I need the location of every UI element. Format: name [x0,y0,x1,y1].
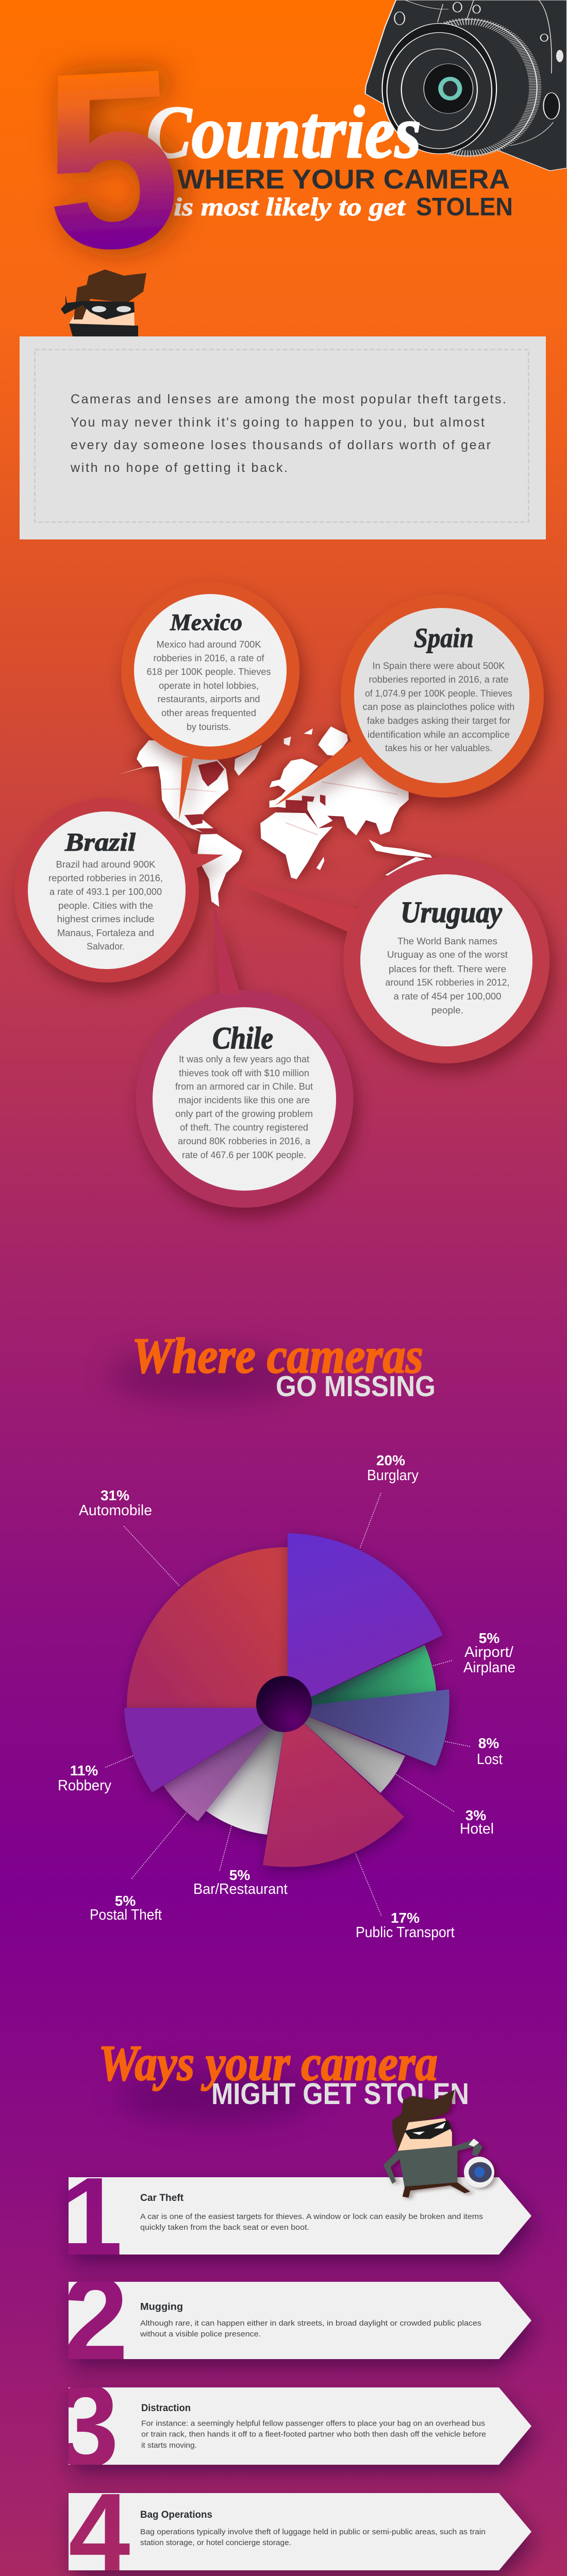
panel: Chile bubble: of theft. The country registered [180,1122,308,1132]
heading: Where cameras go missing [108,1328,436,1403]
panel: Mexico bubble: Mexico [170,609,242,635]
panel: Spain bubble [275,595,544,806]
panel: Spain bubble: takes his or her valuables. [385,743,492,753]
panel: Brazil bubble: Manaus, Fortaleza and [57,928,154,938]
panel: Chile bubble [136,902,354,1208]
panel: 4 Bag Operations [60,2490,543,2576]
chart label: Automobile 31%: Automobile [79,1502,152,1519]
panel: Spain bubble: In Spain there were about 500K [372,660,505,671]
title: Stolen: STOLEN [416,193,513,221]
panel: Chile bubble: rate of 467.6 per 100K people. [182,1150,306,1160]
panel: 2 Mugging: Although rare, it can happen either in dark streets, in broad daylight or crowded public places [140,2319,481,2328]
panel: Spain bubble: Spain [414,622,474,653]
chart label: Hotel 3%: Hotel [460,1821,494,1837]
panel: Brazil bubble: highest crimes include [57,914,155,924]
panel: Spain bubble: of 1,074.9 per 100K people. Thieves [365,688,512,699]
panel: 3 Distraction: or train rack, then hands it off to a fleet-footed partner who both then dash off the vehicle before [141,2430,486,2439]
panel: intro: Cameras and lenses are among the most popular theft targets. [71,392,506,406]
chart label: Lost 8% [445,1735,503,1768]
panel: intro: You may never think it's going to happen to you, but almost [71,415,485,430]
chart label: Public Transport 17% [356,1854,455,1941]
panel: Uruguay bubble: Uruguay as one of the worst [387,950,508,960]
chart label: Bar/Restaurant 5%: 5% [229,1867,250,1883]
panel: Mexico bubble: restaurants, airports and [158,694,260,704]
chart label: Public Transport 17%: 17% [391,1910,420,1926]
title: big number 5: 5 [37,15,187,304]
panel: Brazil bubble: people. Cities with the [58,901,153,911]
chart: pie of theft locations [124,1533,449,1867]
icon: running thief with camera bag [383,2090,494,2198]
panel: 2 Mugging: without a visible police presence. [140,2330,261,2338]
panel: 4 Bag Operations: station storage, or hotel concierge storage. [140,2538,291,2547]
chart label: Airport/Airplane 5% [433,1630,515,1676]
chart: world map [118,726,438,907]
panel: Chile bubble: Chile [212,1021,273,1055]
chart label: Burglary 20% [360,1452,419,1549]
panel: 2 Mugging [61,2279,542,2381]
chart label: Lost 8%: 8% [478,1735,499,1751]
panel: intro [20,336,546,539]
panel: Brazil bubble: Brazil had around 900K [56,859,156,870]
chart label: Postal Theft 5%: Postal Theft [90,1907,162,1923]
panel: intro: every day someone loses thousands of dollars worth of gear [71,438,491,452]
panel: Uruguay bubble [228,857,549,1063]
chart label: Burglary 20%: Burglary [367,1467,419,1484]
heading: Where cameras go missing: Where cameras [132,1328,423,1384]
chart label: Public Transport 17%: Public Transport [356,1924,455,1941]
chart label: Airport/Airplane 5%: Airport/ [464,1644,514,1660]
chart label: Automobile 31% [79,1487,180,1586]
heading: Ways your camera might get stolen: Ways your camera [98,2036,438,2091]
panel: 4 Bag Operations: Bag Operations [140,2510,212,2520]
title: is most likely to get: is most likely to get [174,192,406,221]
panel: intro: with no hope of getting it back. [70,461,288,475]
panel: 1 Car Theft [61,2175,542,2276]
panel: 1 Car Theft: 1 [61,2154,123,2278]
panel: 2 Mugging: Mugging [140,2302,183,2312]
panel: Chile bubble: only part of the growing problem [175,1109,313,1119]
panel: Chile bubble: It was only a few years ago that [179,1054,309,1064]
panel: 1 Car Theft: quickly taken from the back seat or even boot. [140,2223,309,2232]
panel: 3 Distraction: For instance: a seemingly helpful fellow passenger offers to place your bag on an overhead bus [141,2419,485,2428]
chart label: Bar/Restaurant 5% [193,1826,288,1897]
heading: Where cameras go missing: GO MISSING [276,1370,436,1403]
panel: Brazil bubble: reported robberies in 2016, [48,873,163,883]
panel: 2 Mugging: 2 [63,2253,128,2384]
panel: 1 Car Theft: Car Theft [140,2193,184,2204]
panel: 3 Distraction: it starts moving. [141,2441,197,2450]
title: Where your camera: WHERE YOUR CAMERA [177,164,510,195]
panel: Chile bubble: major incidents like this one are [178,1095,310,1106]
panel: Mexico bubble: Mexico had around 700K [157,639,261,650]
chart label: Bar/Restaurant 5%: Bar/Restaurant [193,1881,288,1897]
chart label: Airport/Airplane 5%: Airplane [463,1659,515,1676]
panel: Uruguay bubble: around 15K robberies in 2012, [386,977,509,988]
panel: 1 Car Theft: A car is one of the easiest targets for thieves. A window or lock can easily be broken and items [140,2212,483,2221]
heading: Ways your camera might get stolen: MIGHT GET STOLEN [211,2077,469,2111]
chart label: Hotel 3%: 3% [465,1807,486,1823]
panel: Spain bubble: robberies reported in 2016, a rate [369,674,508,685]
chart label: Automobile 31%: 31% [101,1487,129,1503]
panel: Mexico bubble: other areas frequented [161,708,256,718]
chart label: Robbery 11%: Robbery [58,1777,111,1794]
panel: Mexico bubble: operate in hotel lobbies, [159,681,259,691]
panel: Spain bubble: identification while an accomplice [368,730,510,740]
chart label: Burglary 20%: 20% [376,1452,405,1468]
panel: Brazil bubble: a rate of 493.1 per 100,000 [49,887,162,897]
panel: Uruguay bubble: places for theft. There were [389,964,506,974]
chart label: Airport/Airplane 5%: 5% [479,1630,499,1646]
icon: dark camera, top right [365,0,567,171]
panel: 3 Distraction [60,2384,543,2486]
panel: Chile bubble: from an armored car in Chile. But [175,1081,313,1092]
panel: Spain bubble: fake badges asking their target for [367,716,510,726]
panel: Chile bubble: thieves took off with $10 million [179,1068,309,1078]
panel: Chile bubble: around 80K robberies in 2016, a [178,1136,311,1146]
chart label: Lost 8%: Lost [477,1751,503,1768]
panel: Mexico bubble: robberies in 2016, a rate of [154,653,264,664]
panel: Mexico bubble: 618 per 100K people. Thieves [146,667,271,677]
chart label: Robbery 11%: 11% [70,1762,98,1778]
panel: Mexico bubble [121,582,299,820]
panel: Brazil bubble [14,798,223,982]
panel: Uruguay bubble: Uruguay [401,895,502,929]
panel: Uruguay bubble: a rate of 454 per 100,000 [394,991,501,1002]
panel: 3 Distraction: Distraction [141,2403,191,2414]
chart label: Hotel 3% [396,1774,494,1837]
icon: thief peeking over intro panel [61,269,146,336]
heading: Ways your camera might get stolen [98,2036,469,2123]
panel: Mexico bubble: by tourists. [187,722,231,732]
panel: 3 Distraction: 3 [54,2361,119,2492]
panel: Spain bubble: can pose as plainclothes police with [363,702,514,712]
panel: Brazil bubble: Salvador. [87,941,125,952]
panel: 4 Bag Operations: Bag operations typically involve theft of luggage held in public or semi-public areas, such as train [140,2528,486,2536]
title: Countries: Countries [146,91,421,174]
chart label: Robbery 11% [58,1756,133,1794]
chart label: Postal Theft 5%: 5% [115,1893,136,1909]
panel: Uruguay bubble: The World Bank names [397,936,497,946]
panel: Uruguay bubble: people. [431,1005,463,1015]
panel: Brazil bubble: Brazil [64,827,136,856]
chart label: Postal Theft 5% [90,1813,186,1923]
